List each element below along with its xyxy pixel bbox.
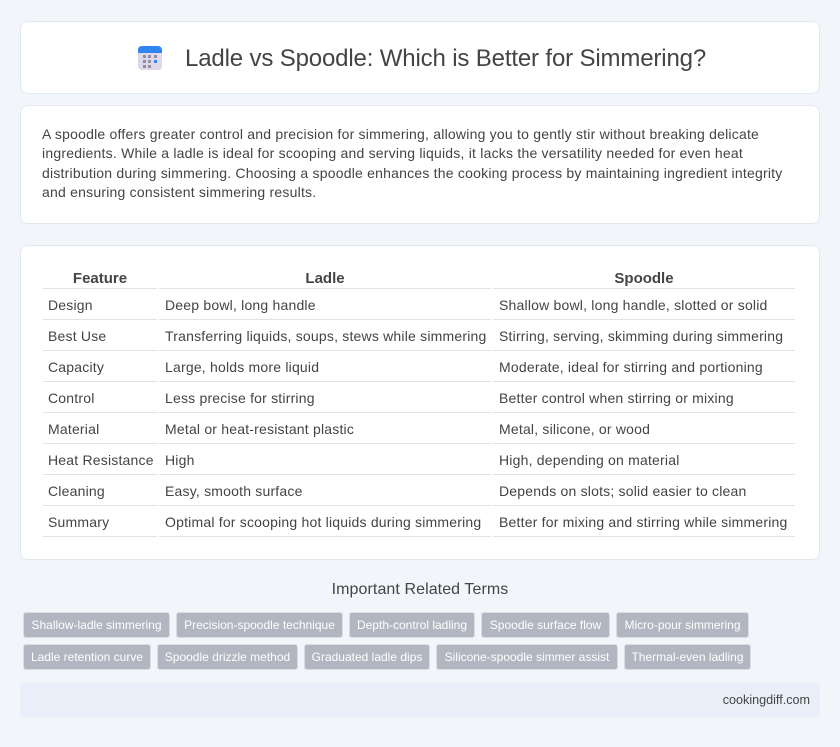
tag list: related terms: Micro-pour simmering [624,618,741,632]
tag list: related terms: Spoodle surface flow [490,618,601,632]
table: comparison: Control [48,390,95,406]
table: comparison: Material [48,421,99,437]
footer bar [20,683,820,717]
panel: comparison table [20,245,820,560]
table: comparison: Moderate, ideal for stirring and portioning [499,359,763,375]
tag list: related terms: Thermal-even ladling [631,650,744,664]
table: comparison: Best Use [48,328,106,344]
tag list: related terms: Silicone-spoodle simmer assist [445,650,609,664]
table: comparison: Metal, silicone, or wood [499,421,650,437]
table: comparison: Optimal for scooping hot liquids during simmering [165,514,481,530]
tag list: related terms: Spoodle drizzle method [165,650,290,664]
table header row: Spoodle [614,270,674,286]
table: comparison: Metal or heat-resistant plastic [165,421,354,437]
table: comparison: Shallow bowl, long handle, slotted or solid [499,297,768,313]
table: comparison: Heat Resistance [48,452,154,468]
table: comparison: Large, holds more liquid [165,359,319,375]
table: comparison: Deep bowl, long handle [165,297,316,313]
table: comparison: Stirring, serving, skimming during simmering [499,328,783,344]
panel: introduction [20,105,820,224]
table header row: Feature [73,270,127,286]
tag list: related terms: Ladle retention curve [31,650,143,664]
tag list: related terms: Depth-control ladling [357,618,467,632]
table: comparison [43,270,795,537]
text block: introduction: distribution during simmering. Choosing a spoodle enhances the cooking process by maintaining ingredient integrity [42,165,782,181]
tag list: related terms: Precision-spoodle technique [184,618,335,632]
table: comparison: Design [48,297,93,313]
table header row [73,270,674,286]
table: comparison: Easy, smooth surface [165,483,303,499]
table: comparison: Better control when stirring or mixing [499,390,734,406]
text block: introduction: and ensuring consistent simmering results. [42,184,316,200]
table: comparison: High, depending on material [499,452,680,468]
heading: important related terms: Important Related Terms [332,581,508,598]
table: comparison: Summary [48,514,109,530]
table: comparison: Better for mixing and stirring while simmering [499,514,788,530]
table: comparison: Cleaning [48,483,105,499]
table header row: Ladle [305,270,345,286]
icon: calendar [138,46,162,70]
table: comparison: Transferring liquids, soups, stews while simmering [165,328,486,344]
tag list: related terms [23,612,751,670]
text block: introduction: A spoodle offers greater control and precision for simmering, allowing you to gently stir without breaking delicate [42,126,759,142]
tag list: related terms: Shallow-ladle simmering [31,618,162,632]
panel: header [20,21,820,94]
footer: site name: cookingdiff.com [723,693,810,707]
table: comparison: Less precise for stirring [165,390,315,406]
table: comparison: Capacity [48,359,104,375]
tag list: related terms: Graduated ladle dips [312,650,422,664]
table: comparison: High [165,452,195,468]
text block: introduction: ingredients. While a ladle is ideal for scooping and serving liquids, it lacks the versatility needed for even heat [42,145,743,161]
table: comparison: Depends on slots; solid easier to clean [499,483,746,499]
text block: introduction [42,126,782,200]
title: Ladle vs Spoodle: Which is Better for Simmering? [185,45,706,72]
